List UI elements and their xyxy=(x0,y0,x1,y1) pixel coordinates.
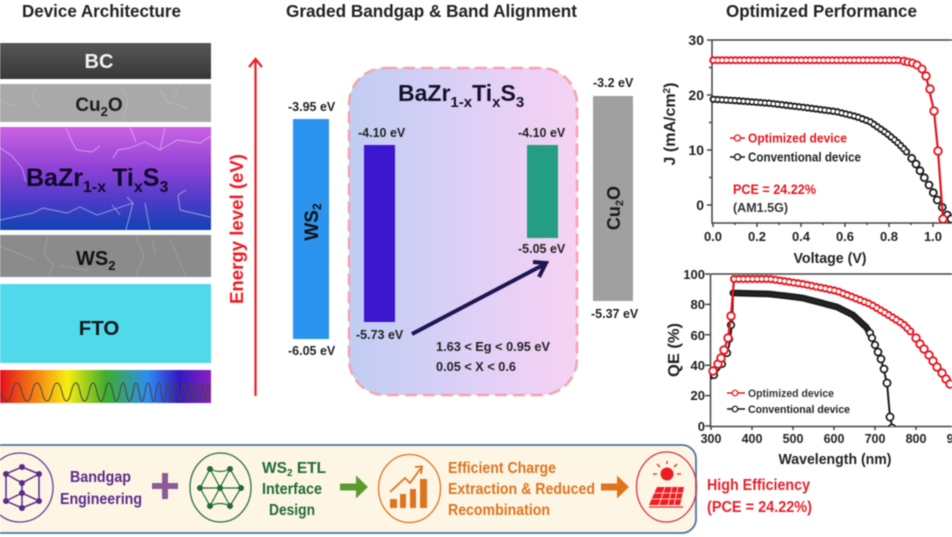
layer: BaZr1-xTixS3 absorber: 3 xyxy=(159,179,168,196)
label: right CB: -4.10 eV xyxy=(518,126,566,140)
layer: BC: BC xyxy=(85,51,113,73)
text: WS2 ETL Interface Design: Interface xyxy=(262,481,322,498)
layer: BaZr1-xTixS3 absorber: Ti xyxy=(112,164,134,192)
arrow: green xyxy=(340,476,368,498)
text: WS2 ETL Interface Design xyxy=(262,460,326,519)
annotation: PCE: PCE = 24.22% xyxy=(733,182,816,197)
icon: rising chart xyxy=(378,454,440,522)
y tick labels: 20 xyxy=(688,87,704,103)
x tick labels: 0.4 xyxy=(792,229,811,244)
layer: WS2: 2 xyxy=(108,258,115,273)
layer: WS2 xyxy=(0,235,211,277)
label: left CB: -4.10 eV xyxy=(358,126,406,140)
label: WS2 VB: -6.05 eV xyxy=(288,344,336,358)
curve: optimized QE xyxy=(709,279,952,388)
band: Cu2O xyxy=(593,96,633,301)
layer: BC xyxy=(0,43,211,79)
panel: bottom workflow banner xyxy=(0,445,812,533)
annotation: AM1.5G: (AM1.5G) xyxy=(733,201,788,215)
y axis title: QE (%) xyxy=(666,323,683,377)
y tick labels: 100 xyxy=(683,267,705,282)
layer: BaZr1-xTixS3 absorber: S xyxy=(143,164,159,192)
text: Bandgap Engineering: Engineering xyxy=(60,491,142,508)
x tick labels: 300 xyxy=(701,432,721,446)
x axis title: Voltage (V) xyxy=(794,250,866,267)
layer: FTO xyxy=(0,284,211,363)
banner background xyxy=(0,445,696,533)
y axis title: J (mA/cm xyxy=(662,93,679,165)
band: WS2: 2 xyxy=(310,203,324,210)
curve: conventional device xyxy=(713,99,952,222)
y tick labels xyxy=(683,267,705,434)
text: Bandgap Engineering xyxy=(60,469,142,508)
chart: J-V curves xyxy=(662,32,952,267)
layer: Cu2O: 2 xyxy=(101,104,108,119)
band: low bandgap side xyxy=(527,145,558,238)
icon: solar panel and sun xyxy=(636,452,696,522)
panel: device layer stack xyxy=(0,43,211,403)
band: Cu2O: O xyxy=(604,186,624,200)
y tick labels xyxy=(688,32,704,213)
x tick labels: 0.0 xyxy=(704,229,722,244)
band: Cu2O: 2 xyxy=(614,200,626,206)
icon: crystal lattice xyxy=(0,453,53,522)
x tick labels: 500 xyxy=(783,432,803,446)
label: left VB: -5.73 eV xyxy=(356,328,404,342)
axes xyxy=(707,40,952,227)
x tick labels xyxy=(704,229,942,244)
label: Cu2O CB: -3.2 eV xyxy=(593,76,634,90)
title: Graded Bandgap and Band Alignment: Graded Bandgap & Band Alignment xyxy=(286,1,577,21)
arrow: orange xyxy=(601,476,629,498)
arrow: graded bandgap xyxy=(412,262,546,334)
light spectrum xyxy=(0,370,211,403)
layer: FTO: FTO xyxy=(79,317,119,340)
layer: BaZr1-xTixS3 absorber: 1-x xyxy=(83,179,106,196)
layer: Cu2O: O xyxy=(108,95,123,116)
label: WS2 CB: -3.95 eV xyxy=(288,100,336,114)
x tick labels: 0.8 xyxy=(880,229,898,244)
y tick labels: 30 xyxy=(688,32,704,48)
text: WS2 ETL Interface Design: Design xyxy=(269,502,315,519)
axis label: Energy level (eV): Energy level (eV) xyxy=(227,154,247,304)
heading: BaZr1-xTixS3: S xyxy=(500,80,516,106)
layer: Cu2O xyxy=(0,84,211,122)
x tick labels: 1.0 xyxy=(924,229,942,244)
text: Efficient Charge Extraction and Reduced Recombination: Efficient Charge xyxy=(448,460,556,477)
arrow: energy level axis xyxy=(249,59,262,396)
text: Bandgap Engineering: Bandgap xyxy=(70,469,131,486)
curve: optimized device xyxy=(713,58,947,223)
chart: QE curves xyxy=(666,267,952,468)
legend: conventional device: Conventional device xyxy=(748,404,850,416)
x tick labels: 800 xyxy=(906,432,926,446)
x tick labels: 700 xyxy=(865,432,885,446)
text: Efficient Charge Extraction and Reduced Recombination: Recombination xyxy=(448,502,550,519)
text: composition range: 0.05 < X < 0.6 xyxy=(436,360,516,374)
legend: optimized device: Optimized device xyxy=(748,388,834,400)
text: High Efficiency result: High Efficiency xyxy=(707,477,810,494)
y axis title: ) xyxy=(662,83,679,88)
text: High Efficiency result xyxy=(707,477,812,516)
x tick labels: 600 xyxy=(824,432,844,446)
panel: graded absorber xyxy=(349,68,577,395)
layer: BaZr1-xTixS3 absorber xyxy=(0,127,211,230)
text: bandgap range: 1.63 < Eg < 0.95 eV xyxy=(436,340,551,354)
y tick labels: 0 xyxy=(698,419,705,434)
heading: BaZr1-xTixS3: 1-x xyxy=(450,94,473,111)
curve: conventional QE xyxy=(711,293,896,432)
icon: WS2 network xyxy=(190,453,251,522)
panel: band alignment xyxy=(288,68,639,395)
band: high bandgap side xyxy=(364,145,395,322)
heading: BaZr1-xTixS3: BaZr xyxy=(398,80,450,106)
heading: BaZr1-xTixS3: Ti xyxy=(472,80,492,106)
title: Device Architecture: Device Architecture xyxy=(22,1,181,21)
band: WS2: WS xyxy=(302,210,323,241)
layer: Cu2O: Cu xyxy=(75,95,101,116)
x tick labels: 400 xyxy=(742,432,762,446)
label: right VB: -5.05 eV xyxy=(518,242,566,256)
layer: BaZr1-xTixS3 absorber: BaZr xyxy=(26,164,83,192)
y tick labels: 60 xyxy=(691,328,705,343)
y axis title: 2 xyxy=(662,87,673,93)
y tick labels: 40 xyxy=(691,358,705,373)
heading: BaZr1-xTixS3: x xyxy=(492,94,501,111)
band: Cu2O: Cu xyxy=(604,206,624,230)
x tick labels: 0.2 xyxy=(748,229,766,244)
icon: plus xyxy=(152,473,178,499)
text: Efficient Charge Extraction and Reduced Recombination: Extraction & Reduced xyxy=(448,481,595,498)
label: Cu2O VB: -5.37 eV xyxy=(591,307,639,321)
text: High Efficiency result: (PCE = 24.22%) xyxy=(707,499,812,516)
text: WS2 ETL Interface Design: ETL xyxy=(293,460,326,477)
layer: WS2: WS xyxy=(76,248,108,270)
text: Efficient Charge Extraction and Reduced Recombination xyxy=(448,460,595,519)
x tick labels xyxy=(701,432,952,446)
legend: conventional device: Conventional device xyxy=(748,150,861,164)
y tick labels: 10 xyxy=(688,142,704,158)
y tick labels: 0 xyxy=(696,197,704,213)
band: WS2 xyxy=(293,119,329,339)
text: WS2 ETL Interface Design: 2 xyxy=(287,468,293,479)
y tick labels: 80 xyxy=(691,297,705,312)
y tick labels: 20 xyxy=(691,388,705,403)
legend: optimized device: Optimized device xyxy=(748,132,847,146)
title: Optimized Performance: Optimized Performance xyxy=(726,1,917,21)
heading: BaZr1-xTixS3: 3 xyxy=(516,94,524,111)
x axis title: Wavelength (nm) xyxy=(778,451,892,468)
layer: BaZr1-xTixS3 absorber: x xyxy=(134,179,143,196)
axes xyxy=(705,274,952,430)
x tick labels: 0.6 xyxy=(836,229,854,244)
text: WS2 ETL Interface Design: WS xyxy=(262,460,287,477)
